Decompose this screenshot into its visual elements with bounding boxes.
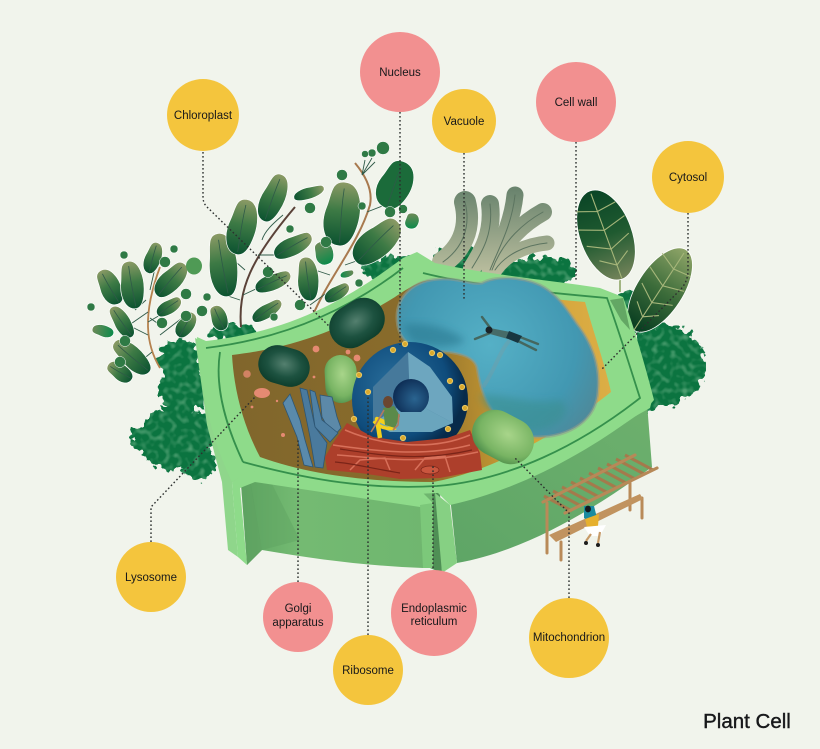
label: Vacuole [432,89,496,153]
label: Mitochondrion: Mitochondrion [533,632,605,644]
cell wall: groove lines [206,268,640,487]
label: Golgi apparatus [263,582,333,652]
cell wall: corner wedge [610,298,630,330]
cell wall: left front panel [232,468,433,568]
bushes behind the cell [131,244,705,480]
label: Mitochondrion [529,598,609,678]
label: Endoplasmic reticulum: Endoplasmic [401,603,467,615]
plant: middle and right sprigs [203,156,419,333]
cytoplasm floor [232,280,611,482]
label: Ribosome [333,635,403,705]
nucleus [352,342,468,458]
mitochondrion: large pale pill [464,402,542,472]
label: Nucleus: Nucleus [379,67,421,79]
label: Nucleus [360,32,440,112]
label: Lysosome: Lysosome [125,572,177,584]
large leaves on the right [565,182,705,349]
endoplasmic reticulum [325,423,482,479]
label: Vacuole: Vacuole [444,116,484,128]
label: Cytosol: Cytosol [669,172,707,184]
cell wall: gap between front panels [430,490,442,573]
leader lines [151,112,688,635]
plant: round buds [87,142,408,368]
label: Golgi apparatus: Golgi [285,603,311,615]
label: Chloroplast: Chloroplast [174,110,233,122]
vacuole [397,278,598,437]
cell wall: right front panel [435,400,652,573]
label: Ribosome: Ribosome [342,665,394,677]
pergola bench with reader [543,455,657,560]
golgi apparatus [283,388,341,468]
label: Cytosol [652,141,724,213]
chloroplast: upper [321,290,393,356]
person sitting on nucleus [371,396,400,438]
fern leaves behind the wall [443,195,547,270]
label: Endoplasmic reticulum [391,570,477,656]
ribosomes on nucleus [351,341,468,441]
chloroplast: lower [254,341,314,391]
mitochondrion: small pale pill [324,354,358,404]
swimmer in vacuole [475,317,538,350]
label: Chloroplast [167,79,239,151]
cell wall: left outer face [195,338,252,557]
label: Endoplasmic reticulum: reticulum [411,616,457,628]
plant: left sprig [91,240,202,386]
label: Cell wall: Cell wall [555,97,597,109]
label: Lysosome [116,542,186,612]
cell wall: top ring [197,252,654,494]
label: Cell wall [536,62,616,142]
title: Plant Cell [703,710,791,733]
label: Golgi apparatus: apparatus [272,617,324,629]
lysosomes [243,346,360,448]
